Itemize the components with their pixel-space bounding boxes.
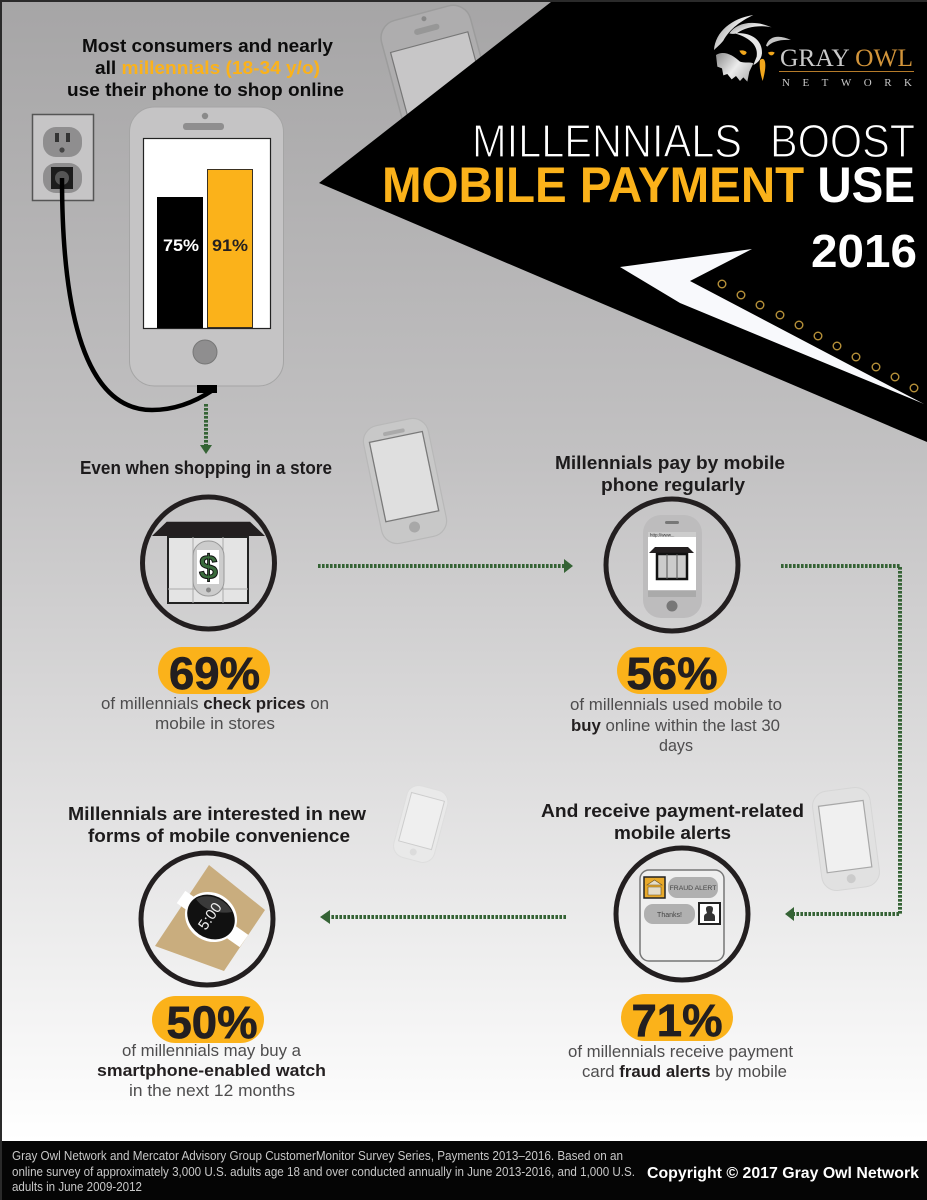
section: alerts bbox=[541, 801, 804, 1081]
icon: fraud alert messages: FRAUD ALERT bbox=[670, 885, 716, 892]
body text: of millennials receive payment bbox=[568, 1042, 793, 1061]
bar: 75% bbox=[157, 197, 203, 328]
faint phone: right bbox=[811, 786, 881, 892]
body text bbox=[570, 695, 782, 755]
source note bbox=[12, 1149, 635, 1194]
icon: fraud alert messages: Thanks! bbox=[657, 912, 682, 919]
body text: smartphone-enabled watch bbox=[97, 1061, 326, 1080]
body text: of millennials may buy a bbox=[122, 1041, 302, 1060]
body text bbox=[568, 1042, 793, 1081]
intro heading: all millennials (18-34 y/o) bbox=[95, 58, 320, 78]
title year: 2016 bbox=[811, 225, 917, 277]
wall outlet bbox=[32, 114, 94, 200]
arrow: alerts to convenience bbox=[320, 910, 566, 924]
stat pill: 50%: 50% bbox=[166, 997, 258, 1048]
charging cable bbox=[62, 178, 217, 410]
intro heading: Most consumers and nearly bbox=[82, 36, 333, 56]
heading: forms of mobile convenience bbox=[88, 826, 350, 846]
body text: of millennials check prices on bbox=[101, 694, 329, 713]
logo wordmark: GRAY OWL bbox=[780, 45, 913, 72]
dotted trail bbox=[718, 280, 918, 392]
icon: fraud alert messages bbox=[616, 848, 748, 980]
icon: smartwatch bbox=[141, 853, 273, 985]
footer bar bbox=[0, 1141, 927, 1200]
faint phone: middle bbox=[361, 416, 449, 546]
body text: in the next 12 months bbox=[129, 1081, 295, 1100]
heading bbox=[555, 453, 785, 495]
icon: phone with store bbox=[606, 499, 738, 631]
logo subtitle: NETWORK bbox=[782, 77, 912, 89]
header black banner bbox=[319, 2, 927, 442]
copyright: Copyright © 2017 Gray Owl Network bbox=[647, 1165, 919, 1182]
heading: Even when shopping in a store bbox=[80, 458, 332, 478]
arrow: phone to store bbox=[200, 404, 212, 454]
body text: days bbox=[659, 736, 693, 755]
stat pill: 69%: 69% bbox=[169, 648, 260, 699]
body text bbox=[101, 694, 329, 733]
bar: 91%: 91% bbox=[212, 236, 248, 255]
body text bbox=[97, 1041, 326, 1100]
section: in-store bbox=[80, 458, 332, 733]
main phone with bar chart bbox=[130, 107, 284, 386]
title line 1: MILLENNIALS bbox=[472, 115, 742, 167]
section: convenience bbox=[68, 804, 367, 1100]
source note: adults in June 2009-2012 bbox=[12, 1180, 142, 1194]
heading bbox=[541, 801, 804, 843]
title line 1 bbox=[472, 115, 915, 167]
stat pill: 71%: 71% bbox=[632, 995, 722, 1046]
icon: smartwatch: 5:00 bbox=[195, 900, 226, 933]
heading bbox=[68, 804, 367, 846]
owl mark bbox=[714, 15, 791, 82]
owl logo bbox=[714, 15, 914, 89]
bar: 75%: 75% bbox=[163, 236, 199, 255]
source note: Gray Owl Network and Mercator Advisory Group CustomerMonitor Survey Series, Payments 2013–2016. Based on an bbox=[12, 1149, 623, 1163]
body text: buy online within the last 30 bbox=[571, 716, 780, 735]
white swoosh bbox=[620, 249, 924, 404]
intro heading: use their phone to shop online bbox=[67, 80, 344, 100]
stat pill: 56%: 56% bbox=[626, 648, 718, 699]
intro heading bbox=[67, 36, 344, 100]
icon: store with phone bbox=[142, 497, 274, 629]
heading: Millennials pay by mobile bbox=[555, 453, 785, 473]
icon: store with phone: $ bbox=[199, 549, 218, 587]
faint phone: lower centre bbox=[391, 783, 451, 865]
source note: online survey of approximately 3,000 U.S. adults age 18 and over conducted annually in June 2013-2016, and 1,000 U.S. bbox=[12, 1165, 635, 1179]
arrow: pay to alerts bbox=[781, 566, 900, 921]
arrow: store to pay bbox=[318, 559, 573, 573]
heading: Millennials are interested in new bbox=[68, 804, 367, 824]
body text: mobile in stores bbox=[155, 714, 275, 733]
heading: phone regularly bbox=[601, 475, 745, 495]
title line 2: MOBILE PAYMENT USE bbox=[382, 157, 915, 213]
heading: And receive payment-related bbox=[541, 801, 804, 821]
icon: phone with store: http://www... bbox=[650, 532, 675, 538]
body text: of millennials used mobile to bbox=[570, 695, 782, 714]
section: pay by mobile bbox=[555, 453, 785, 755]
heading: mobile alerts bbox=[614, 823, 731, 843]
body text: card fraud alerts by mobile bbox=[582, 1062, 787, 1081]
title line 1: BOOST bbox=[770, 115, 915, 167]
faint phone: top bbox=[377, 1, 507, 180]
bar: 91% bbox=[208, 170, 252, 328]
